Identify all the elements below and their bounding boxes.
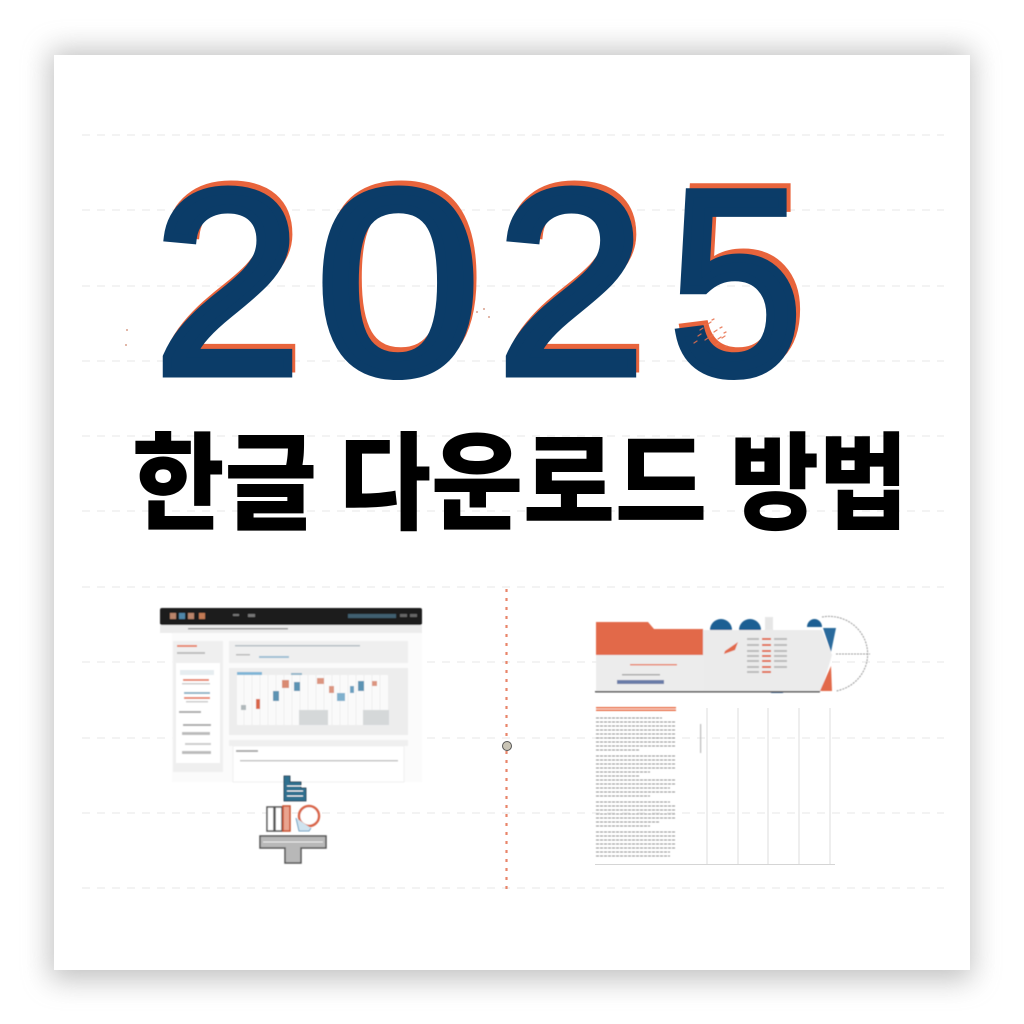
document clipboard [703, 630, 832, 692]
bottom panel [229, 740, 408, 782]
title: 2025: 5 [674, 131, 806, 424]
panel: folder and document illustration [595, 616, 870, 693]
title: 2025: 2 [497, 136, 645, 429]
top info panel [229, 641, 408, 663]
title: 2025: 0 [319, 131, 483, 424]
calendar panel [229, 668, 408, 735]
dotted circle arc [822, 616, 870, 691]
divider: vertical dashed line with node [502, 589, 512, 892]
title: 2025: 5 [670, 136, 802, 429]
title: 2025: 2 [500, 131, 648, 424]
folder tab [596, 622, 703, 655]
chart: vertical grid lines [595, 708, 835, 865]
title: 2025: 0 [316, 136, 480, 429]
speckles on 5 [694, 319, 727, 347]
heading: Korean title [132, 426, 908, 544]
browser toolbar [160, 608, 422, 625]
panel: article text column [596, 707, 701, 856]
sidebar [173, 641, 223, 772]
speckles near zero [125, 308, 490, 346]
heading: Korean title: 한글 [132, 426, 317, 544]
heading: Korean title: 다운로드 [339, 426, 707, 544]
panel: browser screenshot [160, 608, 422, 782]
heading: Korean title: 방법 [730, 426, 908, 544]
title: 2025: 2 [154, 136, 301, 429]
icon: stacked books, clock and T-shaped shelf [260, 776, 326, 863]
title: 2025: 2 [157, 131, 304, 424]
title: 2025 [154, 131, 806, 429]
blue semicircles [710, 619, 822, 693]
